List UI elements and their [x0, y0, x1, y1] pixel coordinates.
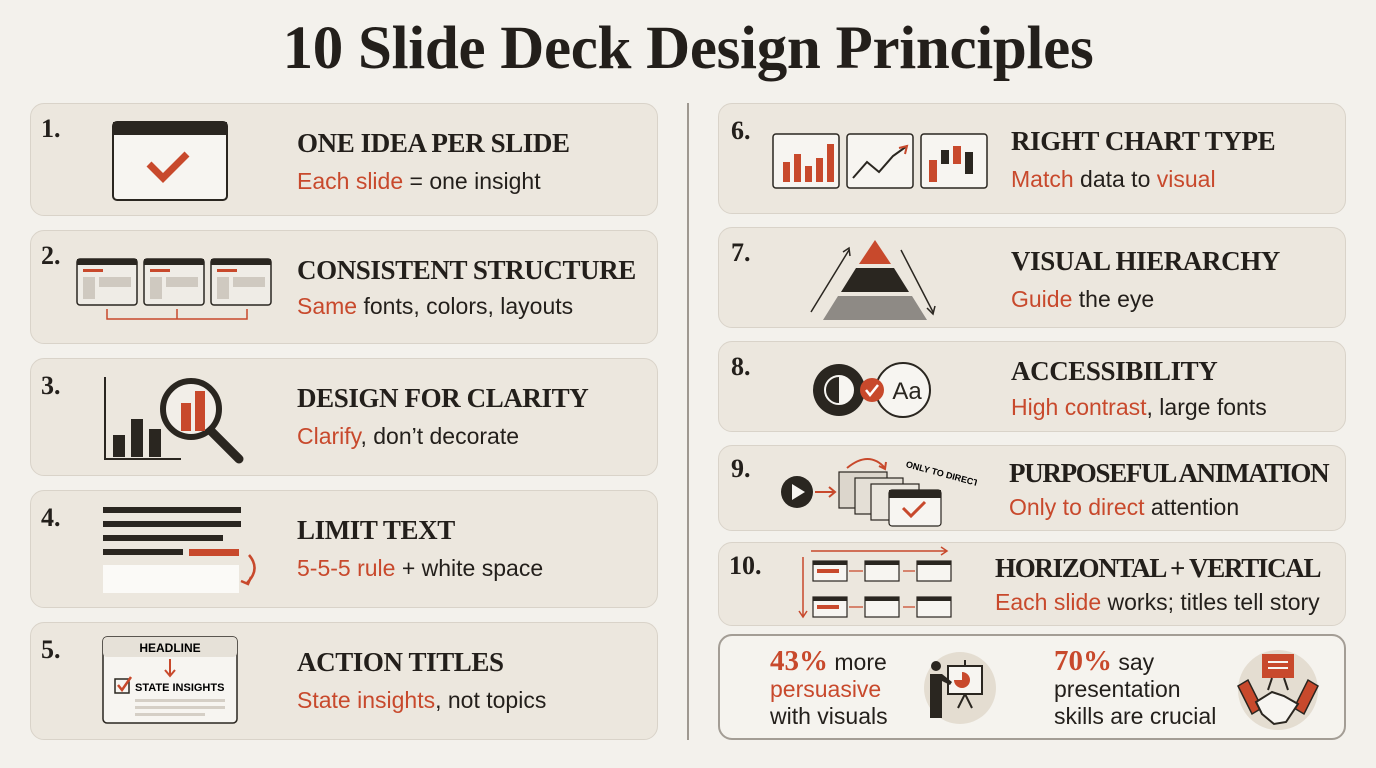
card 10: HORIZONTAL + VERTICAL	[995, 553, 1320, 583]
card 2	[30, 230, 658, 344]
title: 10 Slide Deck Design Principles	[283, 15, 1093, 82]
card 3: 3.	[41, 371, 60, 400]
icon: animation	[781, 458, 977, 527]
card 5: State insights, not topics	[297, 687, 546, 713]
stat: 70%: 70% say	[1054, 645, 1154, 677]
card 9	[718, 445, 1346, 531]
card 4: 4.	[41, 503, 60, 532]
icon: three slides	[76, 258, 272, 320]
stat: 70%	[1054, 645, 1216, 729]
stat: 43%: 43% more	[770, 645, 887, 677]
icon: contrast Aa	[813, 362, 931, 418]
card 1: ONE IDEA PER SLIDE	[297, 128, 570, 158]
card 4: LIMIT TEXT	[297, 515, 455, 545]
card 1: Each slide = one insight	[297, 168, 541, 194]
icon: grid of slides	[798, 546, 952, 618]
card 7: 7.	[731, 238, 750, 267]
card 8: 8.	[731, 352, 750, 381]
card 9: PURPOSEFUL ANIMATION	[1009, 458, 1328, 488]
icon: chart with magnifier	[104, 377, 244, 464]
card 9: 9.	[731, 454, 750, 483]
card 7: Guide the eye	[1011, 286, 1154, 312]
stat: 43%	[770, 645, 888, 729]
icon: slide with check	[112, 121, 228, 201]
card 3	[30, 358, 658, 476]
card 9: Only to direct attention	[1009, 494, 1239, 520]
icon: headline slide: STATE INSIGHTS	[135, 682, 224, 694]
card 6: Match data to visual	[1011, 166, 1216, 192]
card 5: ACTION TITLES	[297, 647, 504, 677]
card 5	[30, 622, 658, 740]
icon: text lines	[103, 507, 256, 593]
stat: 43%: with visuals	[770, 703, 888, 729]
card 3: Clarify, don’t decorate	[297, 423, 519, 449]
card 6	[718, 103, 1346, 214]
icon: headline slide: HEADLINE	[139, 641, 201, 655]
card 5: 5.	[41, 635, 60, 664]
stat: 70%: presentation	[1054, 676, 1181, 702]
card 10: Each slide works; titles tell story	[995, 589, 1320, 615]
card 7: VISUAL HIERARCHY	[1011, 246, 1280, 276]
card 8: High contrast, large fonts	[1011, 394, 1267, 420]
card 3: DESIGN FOR CLARITY	[297, 383, 588, 413]
card 2: CONSISTENT STRUCTURE	[297, 255, 636, 285]
divider	[687, 103, 689, 740]
icon: pyramid	[810, 240, 936, 320]
stat: 70%: skills are crucial	[1054, 703, 1216, 729]
icon: contrast Aa: Aa	[892, 378, 922, 405]
card 1	[30, 103, 658, 216]
stats panel	[718, 634, 1346, 740]
card 4: 5-5-5 rule + white space	[297, 555, 543, 581]
card 2: Same fonts, colors, layouts	[297, 293, 573, 319]
card 2: 2.	[41, 241, 60, 270]
icon: headline slide	[102, 636, 238, 724]
card 8	[718, 341, 1346, 432]
icon: presenter	[924, 652, 996, 724]
card 4	[30, 490, 658, 608]
card 6: 6.	[731, 116, 750, 145]
card 10	[718, 542, 1346, 626]
icon: three charts	[772, 133, 988, 189]
card 10: 10.	[729, 551, 762, 580]
card 6: RIGHT CHART TYPE	[1011, 126, 1275, 156]
card 7	[718, 227, 1346, 328]
stat: 43%: persuasive	[770, 676, 881, 702]
card 8: ACCESSIBILITY	[1011, 356, 1217, 386]
card 1: 1.	[41, 114, 60, 143]
icon: handshake	[1237, 650, 1319, 730]
